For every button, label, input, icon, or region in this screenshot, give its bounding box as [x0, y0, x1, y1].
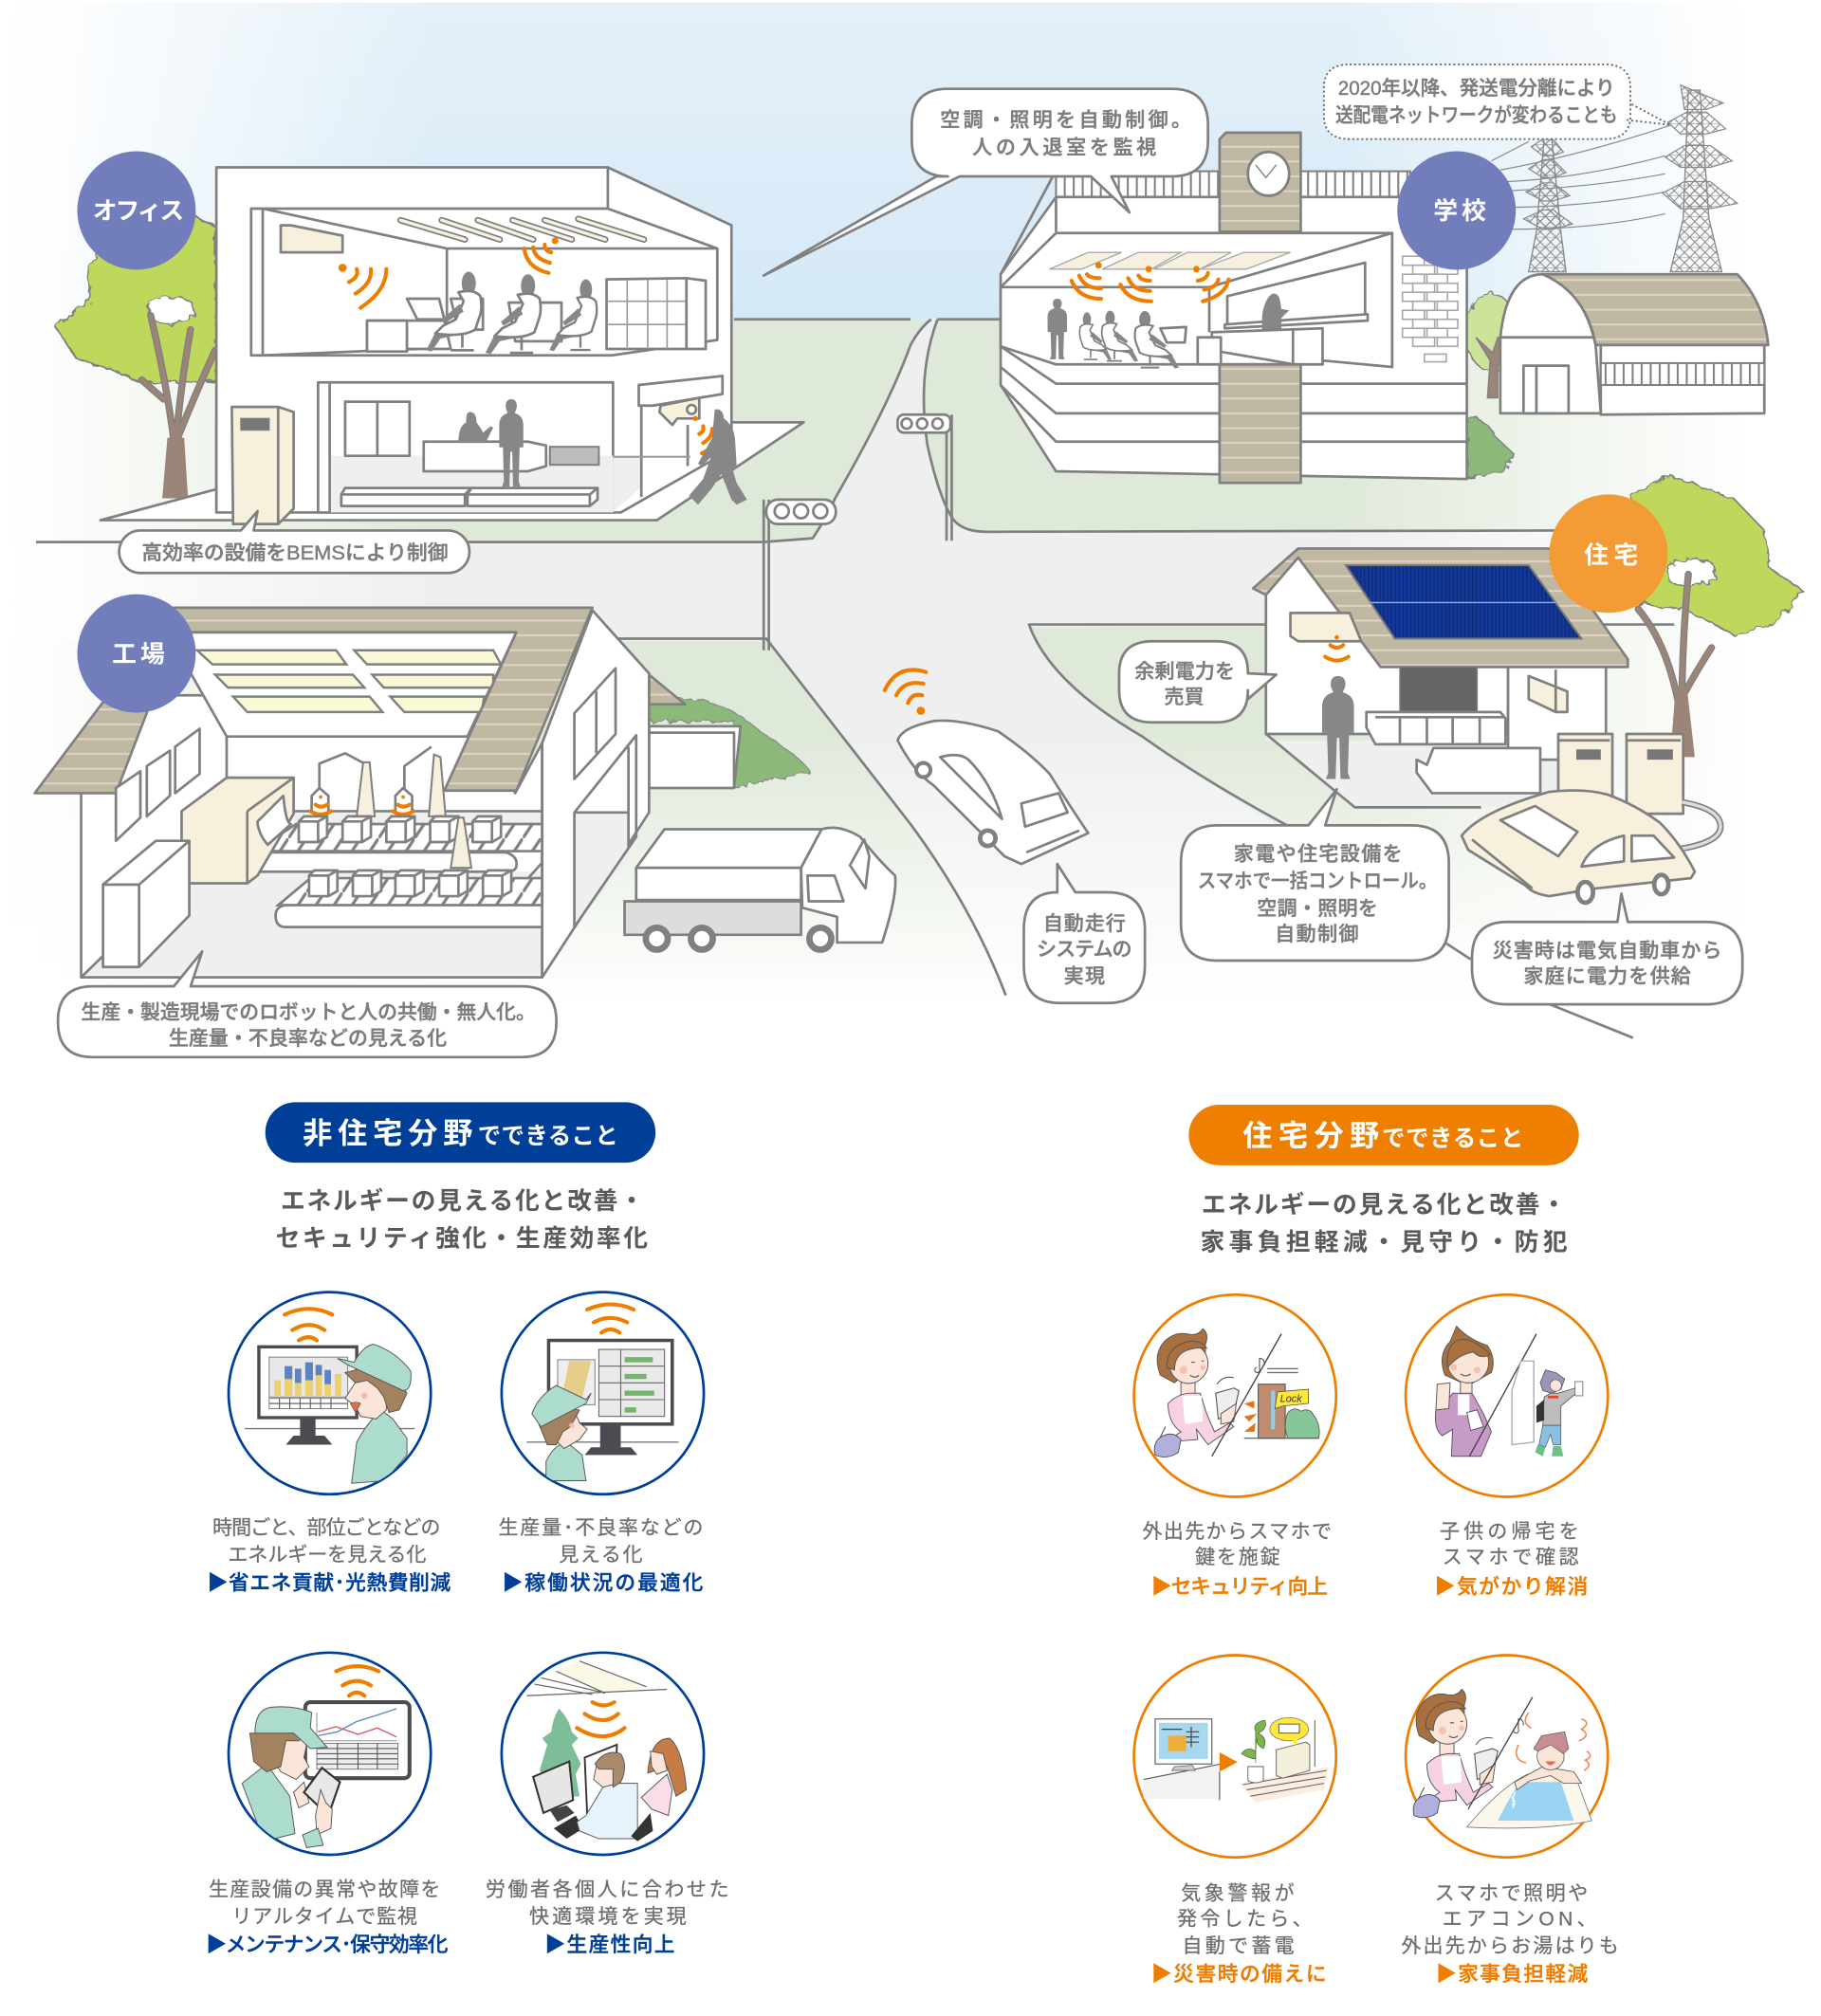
panel: remote lock: [1134, 1294, 1336, 1598]
caption: ▶気がかり解消: [1435, 1574, 1588, 1598]
callout: power network: 2020年以降、発送電分離により: [1338, 77, 1615, 100]
seated staff: [426, 272, 597, 354]
factory left windows: [116, 729, 199, 841]
callout: school air conditioning: [763, 89, 1208, 276]
callout: autonomous driving: システムの: [1037, 939, 1132, 961]
power lines: [1491, 125, 1671, 229]
background ground: [0, 320, 1821, 1015]
icon: woman locking door by smartphone: [1154, 1329, 1319, 1457]
callout: office BEMS: 高効率の設備をBEMSにより制御: [141, 541, 449, 564]
caption: [208, 1516, 451, 1594]
caption: [498, 1516, 704, 1594]
callout: autonomous driving: 自動走行: [1043, 912, 1126, 935]
cream machine: [181, 778, 294, 883]
caption: [1151, 1882, 1327, 1986]
caption: 見える化: [559, 1543, 643, 1566]
caption: ▶セキュリティ向上: [1151, 1574, 1328, 1598]
storage units: [1558, 734, 1683, 814]
caption: ▶家事負担軽減: [1436, 1962, 1589, 1986]
conveyor belt front: [276, 878, 543, 927]
badge: factory: [77, 595, 195, 713]
blackboard: [1227, 263, 1365, 324]
traffic signal 1: [763, 500, 836, 651]
heading: residential: 住宅分野: [1242, 1119, 1379, 1152]
school classroom: [1001, 233, 1392, 369]
meter: [1529, 669, 1568, 712]
teacher desk: [1212, 328, 1323, 364]
ceiling panels: [1050, 252, 1291, 269]
conveyor belt back: [255, 824, 543, 889]
icon: monitor with chart and worker: [245, 1309, 414, 1483]
office lower room: [318, 382, 641, 512]
caption: 鍵を施錠: [1195, 1546, 1280, 1568]
wifi waves: [339, 237, 559, 308]
badge: office: [77, 152, 195, 269]
cone stand: [451, 817, 471, 868]
subheading: non-residential: セキュリティ強化・生産効率化: [276, 1224, 648, 1252]
factory bush: [649, 699, 810, 788]
teacher: [1262, 294, 1289, 330]
person: [1322, 676, 1354, 779]
panel: child return: [1406, 1294, 1608, 1598]
air conditioner: [281, 226, 342, 252]
badge: school: 学校: [1433, 197, 1486, 225]
icon: office workers: [526, 1661, 687, 1842]
planter: [1367, 712, 1505, 744]
callout: smartphone control: スマホで一括コントロール。: [1198, 870, 1437, 892]
caption: エアコンON、: [1443, 1909, 1597, 1931]
window: [345, 402, 410, 456]
caption: スマホで確認: [1443, 1546, 1579, 1568]
boxes on front conveyor: [309, 871, 511, 896]
callout: factory: 生産量・不良率などの見える化: [169, 1027, 447, 1050]
callout: smartphone control: [1181, 789, 1449, 961]
panel: production visualisation: [498, 1292, 704, 1594]
office tree: [55, 217, 216, 498]
self-driving car: [897, 721, 1088, 864]
icon: monitor with worker: [526, 1305, 679, 1481]
caption: 外出先からスマホで: [1142, 1520, 1332, 1543]
school bush: [1467, 416, 1513, 476]
caption: [486, 1878, 729, 1956]
callout: surplus power: [1119, 641, 1277, 723]
heading: non-residential: 非住宅分野: [303, 1117, 472, 1150]
sofas: [341, 488, 598, 506]
skylights: [197, 651, 501, 712]
house roof: [1253, 548, 1628, 667]
caption: スマホで照明や: [1435, 1883, 1588, 1905]
caption: 発令したら、: [1177, 1908, 1313, 1931]
seated receptionist: [458, 412, 493, 443]
subheading: residential: [1201, 1191, 1568, 1255]
transmission tower right: [1663, 85, 1738, 272]
callout: autonomous driving: 実現: [1064, 965, 1105, 988]
entrance canopy and camera: [613, 376, 723, 497]
caption: [1435, 1520, 1588, 1598]
callout: disaster supply: 家庭に電力を供給: [1523, 965, 1691, 988]
ceiling lights: [400, 219, 644, 240]
panel: equipment monitoring: [206, 1653, 449, 1956]
standing person: [1048, 299, 1067, 359]
school tree: [1465, 294, 1518, 398]
caption: 自動で蓄電: [1183, 1934, 1295, 1957]
student desk and laptop: [1160, 327, 1221, 364]
callout: factory: 生産・製造現場でのロボットと人の共働・無人化。: [82, 1001, 536, 1024]
caption: [206, 1878, 449, 1956]
office building: [216, 168, 747, 524]
steps: [1417, 748, 1540, 793]
callout: surplus power: 売買: [1164, 686, 1205, 708]
reception desk: [424, 442, 598, 471]
callout: disaster supply: [1472, 893, 1742, 1004]
icon: woman locking door by smartphone: Lock: [1280, 1394, 1302, 1405]
callout: office BEMS: [120, 511, 469, 573]
heading: residential: [1188, 1105, 1579, 1165]
office ground plate: [101, 422, 803, 521]
walking person: [689, 410, 747, 504]
callout: smartphone control: 自動制御: [1275, 923, 1359, 945]
factory building: [35, 608, 685, 978]
standing person: [499, 399, 524, 486]
electric car: [1462, 791, 1695, 903]
badge: school: [1397, 152, 1516, 269]
truck cab: [801, 828, 895, 943]
caption: 外出先からお湯はりも: [1401, 1934, 1619, 1957]
badge: office: オフィス: [93, 198, 184, 225]
subheading: residential: エネルギーの見える化と改善・: [1202, 1191, 1566, 1219]
background sky: [0, 3, 1821, 320]
back wall: [227, 737, 468, 824]
panel: energy visualisation: [208, 1292, 451, 1594]
caption: ▶稼働状況の最適化: [503, 1570, 704, 1594]
caption: 子供の帰宅を: [1440, 1520, 1579, 1543]
transmission tower left: [1523, 139, 1573, 272]
callout: school air conditioning: 空調・照明を自動制御。: [940, 109, 1191, 132]
charging cable: [1674, 802, 1720, 850]
callout: smartphone control: 家電や住宅設備を: [1234, 843, 1403, 866]
students: [1079, 311, 1179, 369]
wifi waves: [1072, 262, 1228, 302]
robot arms: [310, 747, 446, 816]
laptop and desk: [367, 299, 561, 352]
house air unit: [1291, 613, 1361, 641]
car wifi waves: [885, 669, 926, 715]
clock: [1248, 152, 1289, 195]
power box: [231, 407, 294, 524]
caption: リアルタイムで監視: [231, 1905, 417, 1928]
bottom fade: [0, 734, 1821, 1019]
barn: [1500, 274, 1768, 414]
icon: TV alert and battery: [1144, 1717, 1329, 1803]
lockers: [607, 278, 706, 349]
subheading: residential: 家事負担軽減・見守り・防犯: [1201, 1228, 1568, 1255]
truck wheels: [646, 927, 831, 949]
office upper room: [251, 209, 717, 356]
house door: [1400, 667, 1477, 713]
caption: 労働者各個人に合わせた: [486, 1878, 729, 1900]
subheading: non-residential: エネルギーの見える化と改善・: [281, 1187, 644, 1215]
caption: ▶メンテナンス･保守効率化: [206, 1933, 449, 1956]
caption: 快適環境を実現: [529, 1905, 687, 1928]
school bricks: [1403, 256, 1458, 362]
badge: factory: 工場: [112, 641, 165, 669]
school building: [1001, 133, 1467, 483]
caption: ▶災害時の備えに: [1151, 1962, 1327, 1986]
callout: surplus power: 余剰電力を: [1134, 660, 1235, 683]
road surface: [0, 320, 1821, 1015]
callout: factory: [58, 951, 557, 1057]
right tree: [1626, 475, 1802, 757]
callout: school air conditioning: 人の入退室を監視: [972, 136, 1156, 158]
icon: woman and boy in bath: [1413, 1690, 1591, 1828]
factory annex: [649, 726, 741, 788]
factory roof: [35, 608, 593, 793]
panel: bath remote: [1401, 1656, 1619, 1986]
caption: ▶省エネ貢献･光熱費削減: [208, 1570, 451, 1594]
boxes on back conveyor: [299, 816, 501, 842]
white cabinet: [103, 841, 190, 967]
left fade: [0, 0, 438, 1082]
right fade: [1339, 0, 1821, 1030]
road curb lines: [36, 320, 1674, 1037]
heading: non-residential: [266, 1102, 655, 1163]
caption: 気象警報が: [1181, 1882, 1295, 1905]
caption: 生産量･不良率などの: [498, 1516, 703, 1539]
badge: house: 住宅: [1584, 541, 1638, 569]
caption: [1142, 1520, 1332, 1598]
callout: disaster supply: 災害時は電気自動車から: [1493, 940, 1721, 962]
callout: power network: [1324, 64, 1670, 139]
house: [1253, 548, 1683, 814]
caption: [1401, 1883, 1619, 1986]
solar panels: [1346, 565, 1581, 639]
school tower: [1220, 133, 1300, 483]
badge: house: [1549, 494, 1667, 613]
caption: エネルギーを見える化: [228, 1543, 426, 1566]
callout: power network: 送配電ネットワークが変わることも: [1335, 103, 1617, 126]
traffic signal 2: [897, 414, 951, 541]
panel: weather alert storage: [1134, 1656, 1336, 1986]
heading: residential: でできること: [1382, 1126, 1523, 1151]
skylight ceiling: [168, 632, 516, 737]
factory side wall: [543, 611, 649, 978]
heading: non-residential: でできること: [478, 1124, 618, 1149]
icon: mother and child: [1435, 1327, 1583, 1457]
factory floor: [85, 871, 541, 975]
caption: 生産設備の異常や故障を: [209, 1878, 440, 1900]
caption: ▶生産性向上: [544, 1933, 675, 1956]
truck: [625, 828, 895, 949]
callout: smartphone control: 空調・照明を: [1257, 897, 1378, 920]
caption: 時間ごと、部位ごとなどの: [212, 1516, 440, 1539]
house wifi: [1325, 635, 1349, 661]
panel: comfortable environment: [486, 1653, 729, 1956]
subheading: non-residential: [276, 1187, 648, 1252]
wifi at entrance: [693, 416, 720, 453]
icon: worker with tablet: [242, 1666, 410, 1848]
callout: autonomous driving: [1023, 864, 1145, 1003]
